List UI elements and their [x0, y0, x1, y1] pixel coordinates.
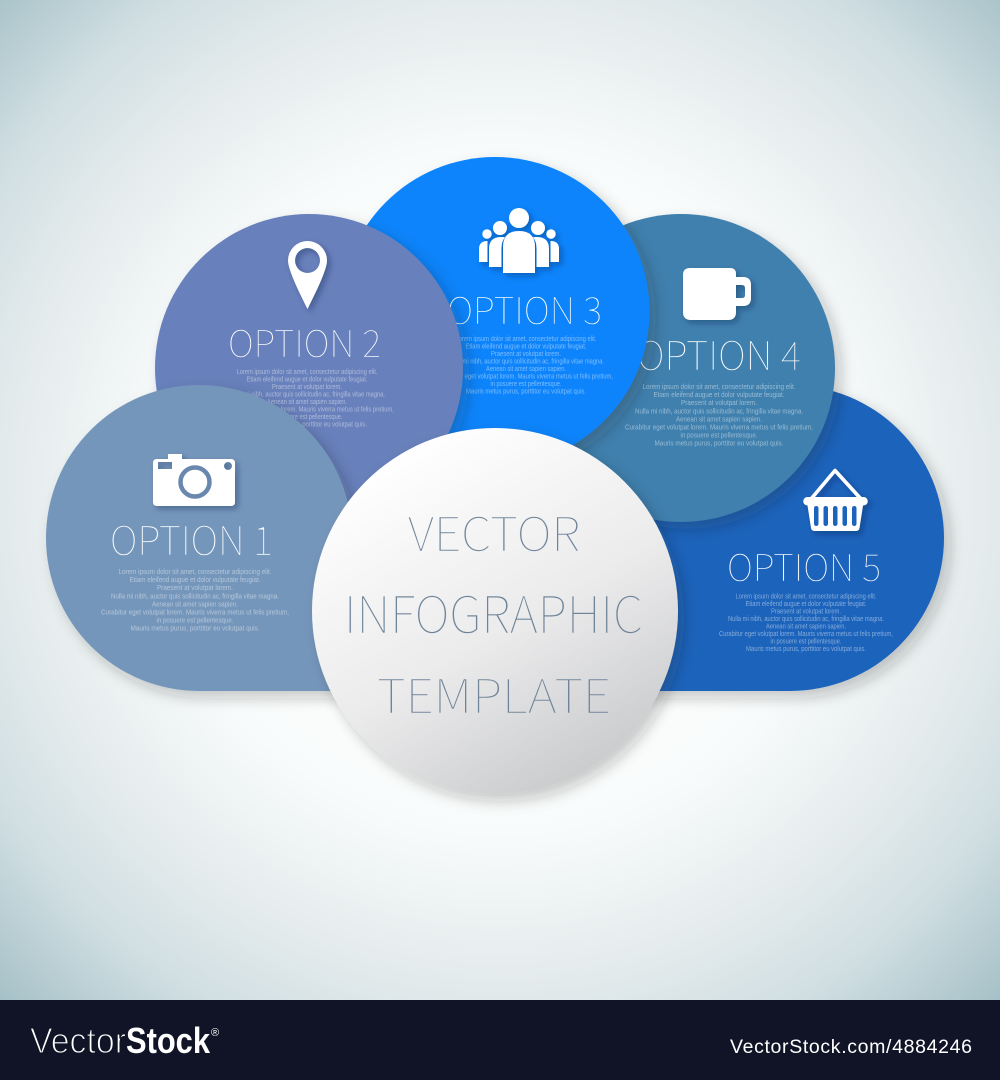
- option 5 shape: [636, 385, 944, 691]
- option 2 body text: in posuere est pellentesque.: [272, 414, 343, 421]
- image id: VectorStock.com/4884246: [730, 1036, 972, 1058]
- option 1 body text: Curabitur eget volutpat lorem. Mauris viverra metus ut felis pretium,: [101, 610, 289, 616]
- option 1 body text: Lorem ipsum dolor sit amet, consectetur adipiscing elit.: [118, 569, 272, 576]
- icon: map pin: [288, 241, 327, 309]
- option 2 body text: [220, 369, 394, 428]
- option 2 body text: Nulla mi nibh, auctor quis sollicitudin ac, fringilla vitae magna.: [229, 392, 385, 398]
- option 1 body text: Mauris metus purus, porttitor eu volutpat quis.: [130, 626, 260, 633]
- option 2 shape: [155, 214, 463, 522]
- option 4 shape: [527, 214, 835, 522]
- option 5 body text: Nulla mi nibh, auctor quis sollicitudin ac, fringilla vitae magna.: [728, 616, 884, 623]
- option 4 body text: Curabitur eget volutpat lorem. Mauris viverra metus ut felis pretium,: [625, 424, 813, 432]
- option 3 body text: in posuere est pellentesque.: [490, 381, 562, 388]
- panel: option 4: [527, 214, 835, 522]
- option 5 body text: Aenean sit amet sapien sapien.: [766, 624, 846, 630]
- option 4 body text: Mauris metus purus, porttitor eu volutpat quis.: [654, 441, 784, 448]
- VectorStock logo: Stock: [126, 1020, 211, 1061]
- option 4 body text: Lorem ipsum dolor sit amet, consectetur adipiscing elit.: [642, 384, 796, 391]
- option 4 title: OPTION 4: [637, 324, 801, 382]
- option 1 body text: Praesent at volutpat lorem.: [157, 585, 233, 592]
- option 1 body text: in posuere est pellentesque.: [156, 618, 234, 625]
- option 4 body text: Nulla mi nibh, auctor quis sollicitudin ac, fringilla vitae magna.: [635, 408, 803, 415]
- panel: center circle: [312, 428, 678, 794]
- option 2 title: OPTION 2: [228, 313, 381, 368]
- option 4 body text: [625, 384, 813, 448]
- option 4 body text: in posuere est pellentesque.: [680, 433, 758, 440]
- option 1 body text: Nulla mi nibh, auctor quis sollicitudin ac, fringilla vitae magna.: [111, 593, 279, 600]
- center title: VECTOR: [408, 496, 580, 565]
- option 5 body text: Etiam eleifend augue et dolor vulputate feugiat.: [746, 601, 867, 608]
- center title: TEMPLATE: [377, 658, 611, 727]
- icon: camera: [153, 454, 235, 506]
- center title: INFOGRAPHIC: [344, 574, 643, 648]
- center title: [344, 496, 643, 727]
- option 5 body text: [719, 594, 893, 653]
- option 5 body text: Praesent at volutpat lorem.: [771, 608, 841, 616]
- option 2 body text: Curabitur eget volutpat lorem. Mauris viverra metus ut felis pretium,: [220, 406, 394, 414]
- icon: cup: [683, 268, 751, 320]
- panel: option 1: [46, 385, 352, 691]
- panel: option 5: [636, 385, 944, 691]
- center circle shape: [312, 428, 678, 794]
- option 1 body text: Etiam eleifend augue et dolor vulputate feugiat.: [130, 577, 261, 584]
- option 5 title: OPTION 5: [727, 537, 881, 592]
- option 3 body text: Curabitur eget volutpat lorem. Mauris viverra metus ut felis pretium,: [439, 374, 613, 380]
- option 1 shape: [46, 385, 352, 691]
- option 2 body text: Mauris metus purus, porttitor eu volutpat quis.: [247, 422, 367, 428]
- panel: option 3: [340, 157, 650, 466]
- icon: basket: [803, 470, 868, 531]
- option 2 body text: Lorem ipsum dolor sit amet, consectetur adipiscing elit.: [236, 369, 378, 376]
- VectorStock logo: ®: [211, 1027, 219, 1039]
- option 4 body text: Etiam eleifend augue et dolor vulputate feugiat.: [654, 392, 785, 399]
- footer bar: [0, 1000, 1000, 1080]
- option 1 body text: [101, 569, 289, 633]
- option 3 shape: [340, 157, 650, 466]
- option 3 body text: Nulla mi nibh, auctor quis sollicitudin ac, fringilla vitae magna.: [448, 358, 604, 366]
- option 3 body text: Lorem ipsum dolor sit amet, consectetur adipiscing elit.: [456, 336, 597, 343]
- option 1 body text: Aenean sit amet sapien sapien.: [152, 601, 238, 608]
- option 2 body text: Aenean sit amet sapien sapien.: [267, 399, 347, 406]
- option 2 body text: Praesent at volutpat lorem.: [272, 384, 342, 391]
- option 3 title: OPTION 3: [447, 280, 602, 335]
- VectorStock logo: [30, 1020, 219, 1061]
- option 5 body text: Lorem ipsum dolor sit amet, consectetur adipiscing elit.: [736, 594, 877, 600]
- option 4 body text: Praesent at volutpat lorem.: [681, 400, 757, 407]
- option 3 body text: Mauris metus purus, porttitor eu volutpat quis.: [466, 388, 586, 396]
- option 3 body text: Praesent at volutpat lorem.: [491, 351, 561, 358]
- option 3 body text: Etiam eleifend augue et dolor vulputate feugiat.: [466, 344, 587, 350]
- option 4 body text: Aenean sit amet sapien sapien.: [676, 416, 762, 423]
- panel: option 2: [155, 214, 463, 522]
- option 5 body text: in posuere est pellentesque.: [770, 638, 842, 646]
- option 3 body text: [439, 336, 613, 396]
- VectorStock logo: Vector: [30, 1020, 126, 1061]
- option 2 body text: Etiam eleifend augue et dolor vulputate feugiat.: [246, 376, 368, 384]
- icon: people: [479, 208, 559, 273]
- option 3 body text: Aenean sit amet sapien sapien.: [486, 366, 566, 373]
- option 5 body text: Mauris metus purus, porttitor eu volutpat quis.: [746, 646, 866, 653]
- option 5 body text: Curabitur eget volutpat lorem. Mauris viverra metus ut felis pretium,: [719, 631, 893, 638]
- option 1 title: OPTION 1: [110, 509, 273, 567]
